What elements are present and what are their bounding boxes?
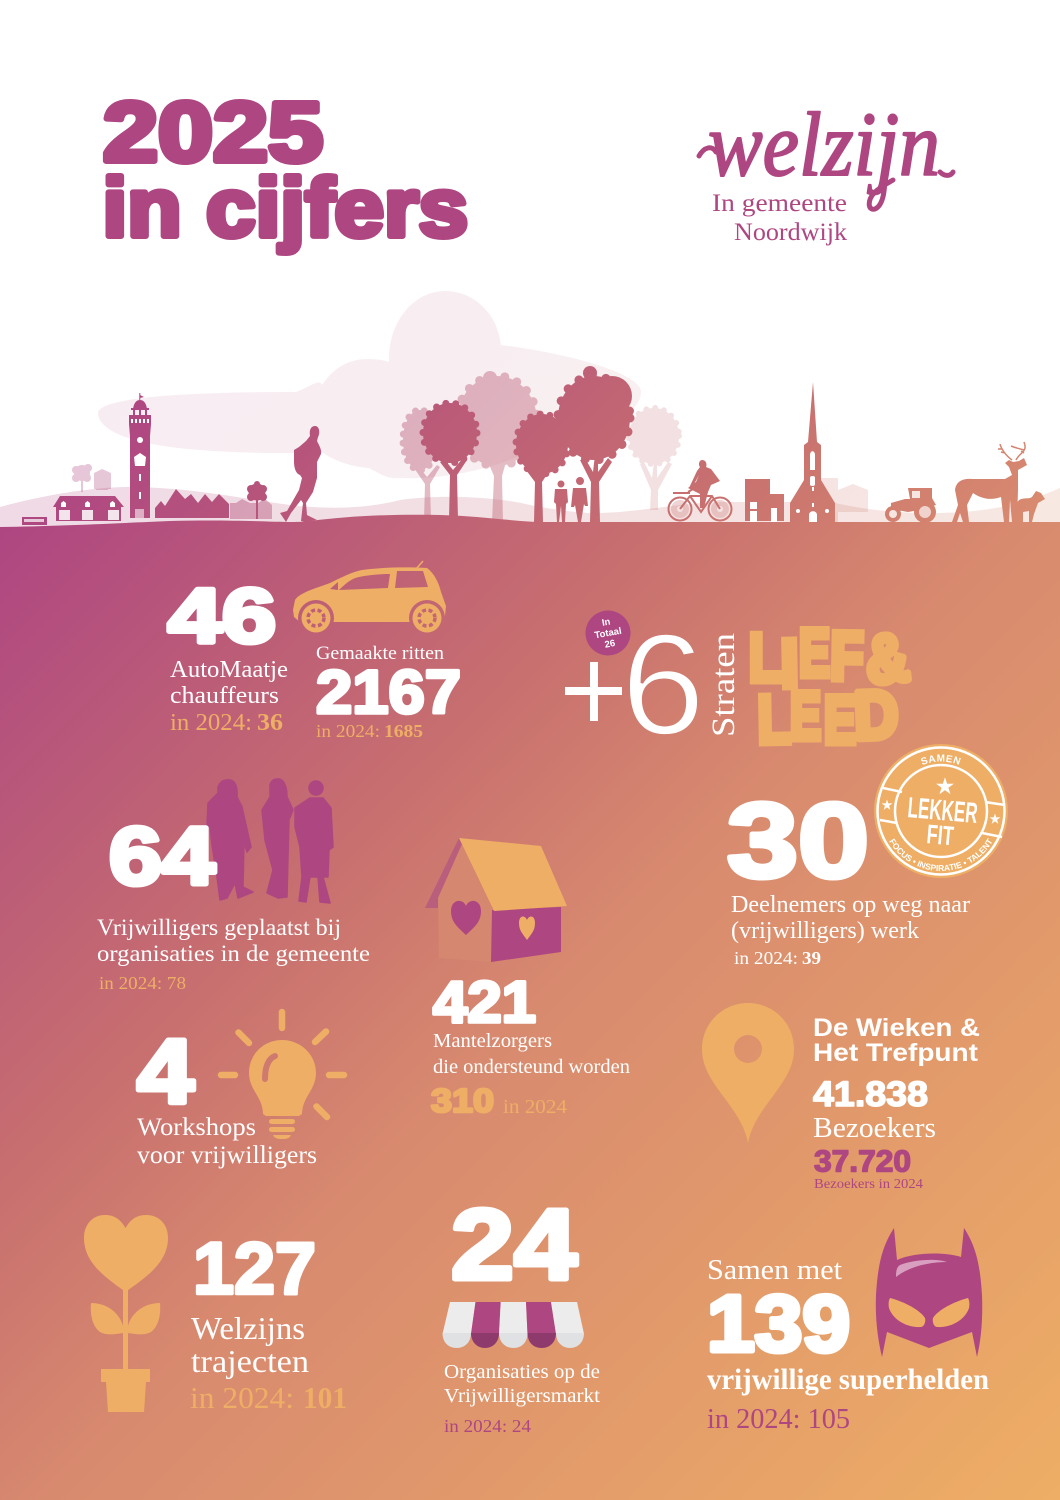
label: [97, 915, 370, 966]
badge: Samen Lekker Fit: FOCUS • INSPIRATIE • TALENT: [889, 838, 992, 871]
heading: Het Trefpunt: [813, 1039, 979, 1067]
badge: in totaal 26: Totaal: [594, 626, 622, 641]
label: [137, 1112, 317, 1169]
logo: welzijn in gemeente Noordwijk: welzijn: [708, 94, 940, 195]
badge: in totaal 26: [586, 610, 630, 656]
logo: welzijn in gemeente Noordwijk: [699, 94, 953, 246]
two people under the trees: [554, 477, 588, 522]
logo: Lief en Leed: E: [790, 678, 821, 754]
number 30: 30: [727, 782, 869, 900]
panel: vrijwilligers geplaatst: [97, 779, 370, 993]
comparison 2024: 101: [303, 1380, 347, 1415]
number 139: 139: [707, 1279, 850, 1368]
number +6: [565, 604, 705, 765]
icon: car: [293, 561, 446, 636]
label superhelden: vrijwillige superhelden: [707, 1363, 989, 1396]
logo: Lief en Leed: &: [862, 619, 912, 699]
logo: Lief en Leed: F: [830, 618, 864, 695]
lighthouse: [129, 393, 151, 518]
label: Vrijwilligers geplaatst bij: [97, 915, 341, 940]
number 127: 127: [193, 1228, 316, 1310]
label: Workshops: [137, 1112, 256, 1141]
label: Welzijns: [191, 1310, 305, 1346]
comparison 2024: Bezoekers in 2024: [814, 1177, 923, 1192]
dark trees: [423, 366, 632, 522]
heading: [813, 1014, 980, 1067]
comparison 2024: in 2024: 78: [99, 973, 186, 993]
comparison 2024: [190, 1380, 347, 1415]
rides comparison: in 2024:: [316, 721, 380, 741]
comparison 2024: in 2024:: [170, 710, 252, 736]
panel: workshops: [137, 1012, 344, 1169]
heading: De Wieken &: [813, 1014, 980, 1042]
panel: AutoMaatje: [168, 561, 461, 741]
rides comparison: [316, 721, 423, 741]
label straten: Straten: [706, 633, 742, 737]
label: [191, 1310, 309, 1379]
number 64: 64: [109, 811, 215, 902]
label visitors: Bezoekers: [813, 1112, 936, 1144]
badge: in totaal 26: 26: [604, 638, 616, 651]
number 421: 421: [433, 970, 536, 1035]
panel: mantelzorgers: [425, 838, 630, 1119]
comparison 2024: 36: [257, 710, 283, 736]
label: [444, 1362, 601, 1407]
comparison 2024: in 2024: 105: [707, 1404, 850, 1435]
number 4: 4: [137, 1022, 194, 1123]
rides comparison: 1685: [384, 721, 423, 741]
pale town houses: [820, 478, 868, 522]
badge: Samen Lekker Fit: ★: [990, 812, 1001, 826]
logo: welzijn in gemeente Noordwijk: Noordwijk: [734, 219, 848, 246]
hills: [0, 487, 1060, 530]
panel: Lief en Leed straten: [565, 604, 912, 765]
label: trajecten: [191, 1343, 309, 1379]
label: die ondersteund worden: [433, 1057, 630, 1078]
icon: superhero mask: [876, 1228, 982, 1357]
badge: Samen Lekker Fit: ★: [882, 798, 893, 812]
comparison 2024: [431, 1082, 567, 1119]
label: organisaties in de gemeente: [97, 941, 370, 966]
cloud: [98, 291, 641, 478]
label: chauffeurs: [170, 683, 279, 709]
label: Deelnemers op weg naar: [731, 892, 970, 918]
label: Mantelzorgers: [433, 1031, 552, 1052]
badge: Samen Lekker Fit: LEKKER: [906, 792, 979, 830]
logo: Lief en Leed: L: [749, 620, 781, 696]
pale trees: [403, 371, 537, 522]
far trees and houses: [72, 464, 111, 492]
title: in cijfers: [102, 161, 468, 254]
comparison 2024: [734, 948, 821, 968]
tractor: [885, 488, 936, 523]
label samen met: Samen met: [707, 1254, 842, 1286]
ground: [0, 515, 1060, 1500]
label: AutoMaatje: [170, 657, 288, 683]
badge: Samen Lekker Fit: ★: [936, 776, 954, 798]
icon: heart flower: [84, 1215, 168, 1412]
logo: Lief en Leed: I: [780, 626, 799, 702]
label: [170, 657, 288, 709]
label: Organisaties op de: [444, 1362, 600, 1383]
number 46: 46: [168, 574, 276, 660]
label: [433, 1031, 630, 1078]
small houses and tree: [230, 481, 272, 519]
number visitors: 41.838: [813, 1075, 928, 1114]
logo: welzijn in gemeente Noordwijk: In gemeente: [712, 190, 847, 217]
logo: Lief en Leed: E: [824, 682, 856, 758]
logo: Lief en Leed: D: [853, 677, 899, 754]
icon: three people: [207, 779, 333, 903]
comparison 2024: in 2024:: [190, 1380, 294, 1415]
buildings left: [22, 489, 229, 525]
label: (vrijwilligers) werk: [731, 918, 919, 944]
deer and fawn: [952, 442, 1045, 522]
comparison 2024: 39: [802, 948, 821, 968]
number +6: 6: [621, 604, 705, 765]
logo: Lief en Leed: E: [799, 615, 830, 691]
comparison 2024: 37.720: [814, 1144, 911, 1178]
town buildings: [745, 479, 784, 522]
number 24: 24: [451, 1189, 577, 1301]
title: [102, 85, 468, 254]
badge: Samen Lekker Fit: SAMEN: [921, 754, 961, 765]
panel: superhelden: [707, 1228, 989, 1435]
label: Vrijwilligersmarkt: [444, 1386, 601, 1407]
comparison 2024: in 2024: 24: [444, 1416, 531, 1436]
comparison 2024: in 2024: [503, 1097, 567, 1118]
walker with backpack: [280, 426, 321, 522]
icon: light bulb: [221, 1012, 344, 1139]
panel: De Wieken en Het Trefpunt: [702, 1003, 980, 1192]
cyclist: [668, 460, 732, 520]
logo: Lief en Leed: [749, 615, 912, 758]
panel: vrijwilligersmarkt: [442, 1189, 601, 1436]
comparison 2024: 310: [431, 1082, 494, 1119]
icon: house with hearts: [425, 838, 567, 962]
badge: Samen Lekker Fit: FIT: [925, 819, 955, 851]
church: [790, 382, 835, 522]
number 2167: 2167: [316, 658, 461, 726]
panel: Lekker Fit: [726, 744, 1008, 968]
comparison 2024: [814, 1144, 923, 1192]
badge: in totaal 26: In: [601, 616, 611, 629]
label: [731, 892, 970, 944]
title: 2025: [103, 85, 323, 179]
rides label: Gemaakte ritten: [316, 643, 445, 664]
panel: welzijnstrajecten: [84, 1215, 347, 1415]
label: voor vrijwilligers: [137, 1140, 317, 1169]
logo: Lief en Leed: L: [757, 681, 791, 758]
comparison 2024: in 2024:: [734, 948, 798, 968]
icon: market awning: [442, 1302, 584, 1348]
icon: map pin: [702, 1003, 794, 1143]
far right pale tree: [629, 408, 679, 510]
badge: Samen Lekker Fit: [874, 744, 1008, 878]
